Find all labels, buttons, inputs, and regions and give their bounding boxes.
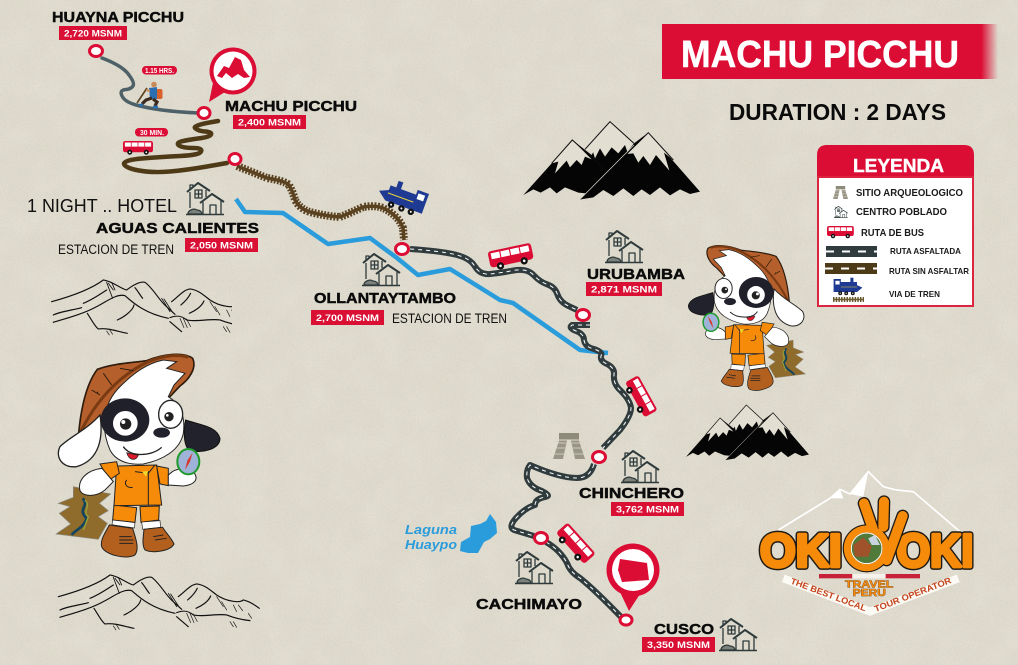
label: Aguas Calientes: 2,050 MSNM — [190, 240, 253, 250]
label: Laguna Huaypo: Laguna — [405, 522, 457, 537]
tag: bus time: 30 MIN. — [140, 130, 164, 137]
paved road: Ollantaytambo to Urubamba — [410, 249, 577, 310]
mascot: large dog — [56, 354, 220, 557]
label: Huayna Picchu — [52, 9, 184, 40]
label: Ollantaytambo: OLLANTAYTAMBO — [314, 290, 456, 307]
legend row: bus route: RUTA DE BUS — [861, 227, 924, 239]
legend row: paved road — [826, 246, 961, 257]
legend row: populated centre: CENTRO POBLADO — [856, 206, 947, 218]
icon: house Ollantaytambo — [362, 254, 400, 286]
icon: blue train — [375, 176, 430, 219]
label: Ollantaytambo — [311, 290, 456, 325]
logo mountain outline — [778, 472, 960, 532]
mascot: small dog — [688, 246, 806, 390]
logo subtitle — [845, 579, 893, 599]
legend row: unpaved road — [825, 263, 969, 276]
logo hand — [847, 502, 903, 568]
note: Aguas Calientes station: ESTACION DE TREN — [58, 242, 174, 257]
label: Ollantaytambo: 2,700 MSNM — [316, 313, 379, 323]
logo subtitle: TRAVEL — [845, 579, 893, 590]
label: Chinchero: 3,762 MSNM — [616, 504, 679, 514]
tag: hike time: 1.15 HRS. — [145, 68, 174, 75]
icon: bus on road 1 — [487, 243, 535, 271]
icon: house Cusco — [719, 619, 757, 650]
icon: house Cachimayo — [515, 552, 553, 584]
logo ribbon — [783, 575, 958, 614]
icon: lake — [460, 514, 497, 553]
label: Huayna Picchu: 2,720 MSNM — [64, 28, 122, 38]
legend heading: LEYENDA — [853, 156, 944, 176]
icon: house Urubamba — [605, 231, 643, 262]
route nodes — [90, 46, 632, 625]
logo: Oki Doki Travel Peru — [760, 472, 973, 614]
icon: house Aguas Calientes — [186, 183, 224, 214]
label: Urubamba: URUBAMBA — [587, 266, 685, 283]
legend row: railway: VIA DE TREN — [889, 289, 940, 299]
label: Cusco: 3,350 MSNM — [647, 640, 710, 650]
sketch mountains: upper left — [52, 280, 253, 335]
pin: Machu Picchu — [209, 48, 256, 102]
note: overnight hotel: 1 NIGHT .. HOTEL — [27, 195, 177, 216]
icon: small bus — [123, 141, 153, 155]
sketch mountains: lower left — [58, 575, 259, 630]
icon: bus on road 2 — [622, 375, 658, 419]
note: Ollantaytambo station: ESTACION DE TREN — [392, 311, 507, 326]
logo ribbon: TOUR OPERATOR — [873, 575, 953, 614]
legend row: railway — [833, 278, 940, 300]
logo wordmark — [760, 525, 973, 577]
label: Machu Picchu: 2,400 MSNM — [238, 118, 301, 128]
panel: legend — [817, 145, 974, 306]
label: Cusco: CUSCO — [654, 621, 714, 638]
icon: hiker — [137, 82, 162, 107]
pin: Cusco — [606, 544, 660, 611]
label: Urubamba — [586, 266, 685, 296]
icon: house Chinchero — [621, 451, 659, 482]
trail: Huayna Picchu to Machu Picchu — [102, 58, 198, 113]
label: Laguna Huaypo — [405, 522, 457, 552]
legend row: paved road: RUTA ASFALTADA — [890, 246, 961, 256]
title banner: MACHU PICCHU — [681, 34, 959, 76]
legend row: archaeological site: SITIO ARQUEOLOGICO — [856, 187, 963, 199]
label: Aguas Calientes — [96, 220, 259, 252]
logo wordmark: OKI — [897, 525, 973, 577]
paved road: Chinchero to Cachimayo — [511, 464, 594, 536]
unpaved road: Machu Picchu to Aguas Calientes — [124, 121, 227, 172]
legend row: bus route — [827, 226, 924, 239]
label: Cachimayo: CACHIMAYO — [476, 596, 582, 613]
paved road: Urubamba to Chinchero — [571, 325, 631, 448]
paved road: Cachimayo to Cusco — [546, 542, 622, 618]
logo wordmark: OKI — [897, 525, 973, 577]
railway track: Aguas Calientes to Ollantaytambo — [237, 166, 404, 240]
label: Cusco — [642, 621, 715, 652]
label: Huayna Picchu: HUAYNA PICCHU — [52, 9, 184, 26]
logo stripes — [819, 574, 920, 578]
label: Laguna Huaypo: Huaypo — [405, 537, 457, 552]
logo wordmark: OKI — [760, 525, 842, 577]
legend row: unpaved road: RUTA SIN ASFALTAR — [889, 266, 969, 276]
icon: bus on road 3 — [553, 522, 596, 566]
label: Chinchero — [579, 485, 684, 516]
icon: large black mountains — [523, 122, 700, 199]
label: Chinchero: CHINCHERO — [579, 485, 684, 502]
duration subtitle: DURATION : 2 DAYS — [729, 99, 946, 125]
logo ribbon: THE BEST LOCAL — [789, 576, 868, 613]
logo subtitle: PERU — [853, 588, 886, 599]
label: Urubamba: 2,871 MSNM — [591, 284, 657, 294]
logo wordmark: OKI — [760, 525, 842, 577]
label: Aguas Calientes: AGUAS CALIENTES — [96, 220, 259, 237]
icon: small black mountains — [686, 405, 809, 460]
icon: temple ruins — [553, 433, 585, 459]
tag: bus time — [135, 128, 168, 137]
blue railway line — [236, 199, 608, 353]
title banner — [662, 24, 998, 79]
label: Machu Picchu: MACHU PICCHU — [225, 98, 357, 115]
label: Machu Picchu — [225, 98, 357, 129]
